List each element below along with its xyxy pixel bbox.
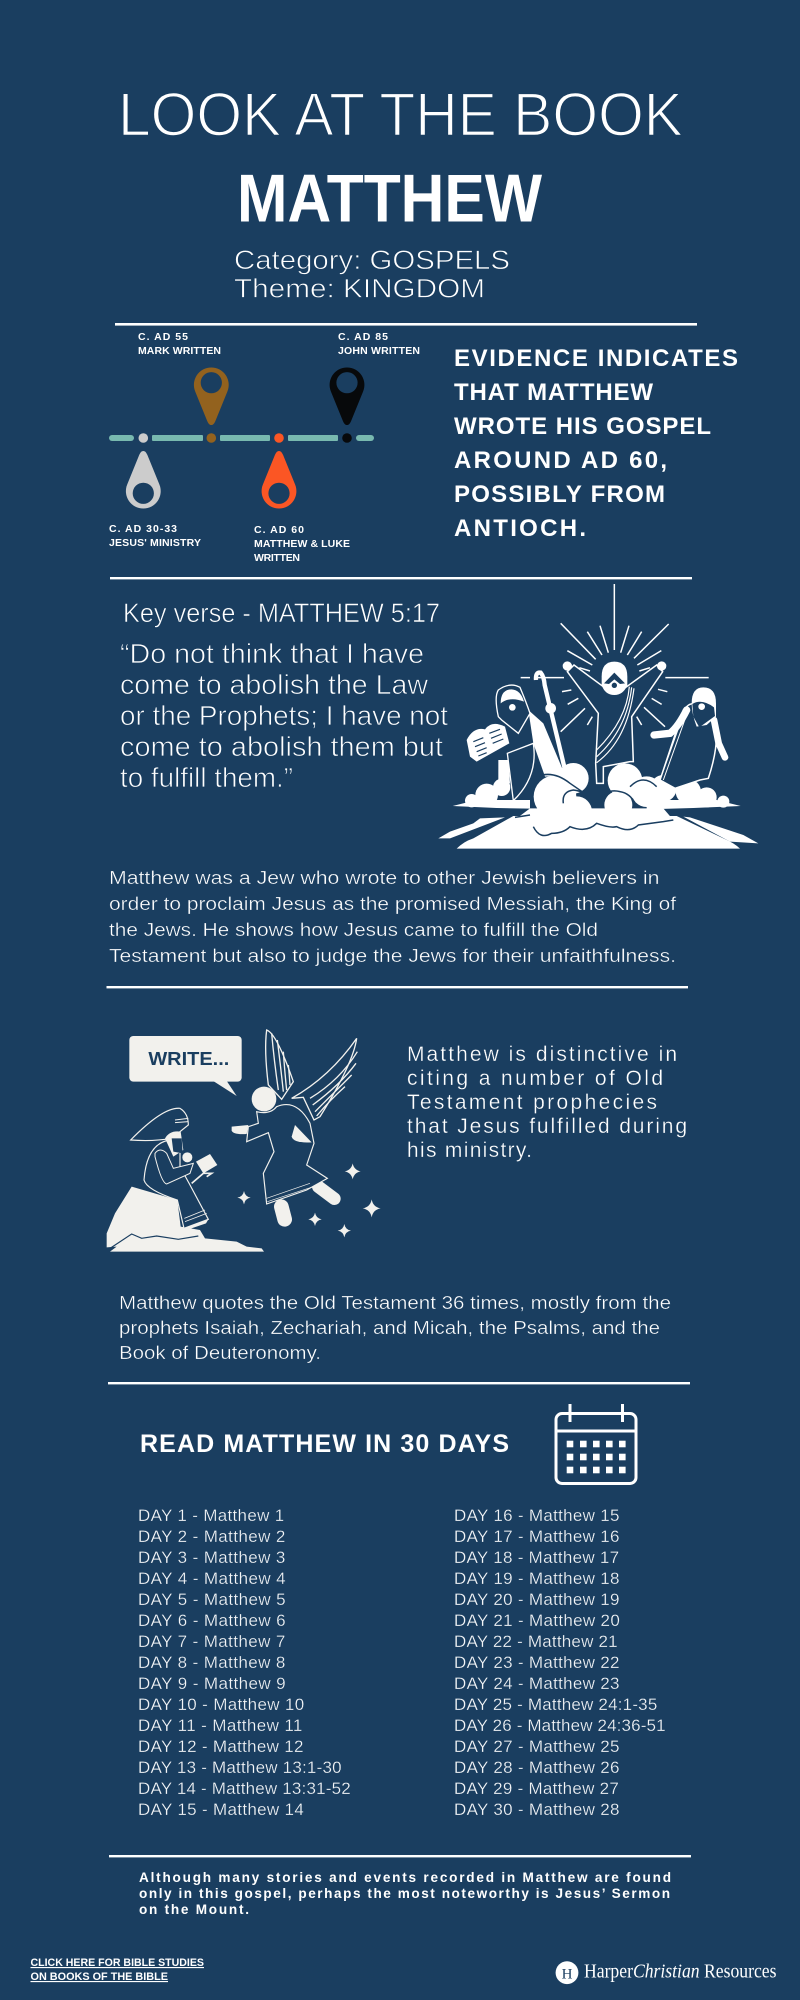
label: Mark [138, 331, 221, 357]
evidence statement: ANTIOCH. [454, 515, 586, 542]
evidence statement: POSSIBLY FROM [454, 481, 665, 508]
distinctive callout text: Matthew is distinctive in [407, 1043, 677, 1066]
reading plan: days 16 to 30: DAY 29 - Matthew 27 [454, 1779, 619, 1798]
key verse heading: Key verse - MATTHEW 5:17 [123, 598, 440, 628]
key verse quote [120, 638, 448, 793]
distinctive callout text: that Jesus fulfilled during [407, 1115, 687, 1138]
reading plan: days 16 to 30: DAY 17 - Matthew 16 [454, 1527, 620, 1546]
title: MATTHEW [237, 161, 543, 237]
timeline dots [138, 433, 352, 443]
sparkles [237, 1163, 381, 1237]
reading plan: days 16 to 30: DAY 30 - Matthew 28 [454, 1800, 620, 1819]
reading plan: days 1 to 15: DAY 13 - Matthew 13:1-30 [138, 1758, 342, 1777]
label: Jesus' ministry [109, 523, 201, 549]
reading plan: days 1 to 15: DAY 11 - Matthew 11 [138, 1716, 302, 1735]
closing note [139, 1870, 671, 1917]
label: Matthew and Luke: WRITTEN [254, 552, 300, 564]
reading plan: days 1 to 15: DAY 10 - Matthew 10 [138, 1695, 304, 1714]
evidence statement: WROTE HIS GOSPEL [454, 413, 711, 440]
label: Mark: MARK WRITTEN [138, 345, 221, 357]
distinctive callout text: citing a number of Old [407, 1067, 663, 1090]
reading plan: days 16 to 30: DAY 20 - Matthew 19 [454, 1590, 620, 1609]
logo: HarperChristian Resources: H [562, 1966, 573, 1982]
icon: calendar [556, 1404, 636, 1484]
label: John: JOHN WRITTEN [338, 345, 420, 357]
category and theme: Theme: KINGDOM [234, 274, 485, 304]
figure: Jesus [563, 661, 666, 783]
reading plan: days 16 to 30: DAY 21 - Matthew 20 [454, 1611, 620, 1630]
key verse quote: or the Prophets; I have not [120, 700, 448, 731]
key verse quote: come to abolish them but [120, 731, 443, 762]
reading plan: days 16 to 30: DAY 26 - Matthew 24:36-51 [454, 1716, 666, 1735]
evidence statement: EVIDENCE INDICATES [454, 345, 738, 372]
label: John [338, 331, 420, 357]
logo: HarperChristian Resources: HarperChristian Resources [584, 1962, 776, 1982]
closing note: on the Mount. [139, 1902, 249, 1917]
reading plan: days 1 to 15 [138, 1506, 351, 1819]
title [118, 81, 683, 237]
angel [232, 1030, 357, 1219]
key verse quote: “Do not think that I have [120, 638, 424, 669]
reading plan heading: READ MATTHEW IN 30 DAYS [140, 1430, 509, 1458]
speech bubble [129, 1036, 242, 1096]
reading plan: days 16 to 30: DAY 25 - Matthew 24:1-35 [454, 1695, 657, 1714]
paragraph: who Matthew was: Matthew was a Jew who wrote to other Jewish believers in [109, 867, 660, 888]
paragraph: who Matthew was: Testament but also to judge the Jews for their unfaithfulness. [109, 945, 676, 966]
reading plan: days 1 to 15: DAY 7 - Matthew 7 [138, 1632, 285, 1651]
reading plan: days 1 to 15: DAY 3 - Matthew 3 [138, 1548, 285, 1567]
closing note: only in this gospel, perhaps the most noteworthy is Jesus’ Sermon [139, 1886, 670, 1901]
label: Matthew and Luke [254, 524, 350, 564]
label: John: C. AD 85 [338, 331, 388, 343]
paragraph: who Matthew was: order to proclaim Jesus as the promised Messiah, the King of [109, 893, 677, 914]
reading plan: days 1 to 15: DAY 1 - Matthew 1 [138, 1506, 284, 1525]
scribe [131, 1108, 217, 1230]
distinctive callout text [407, 1043, 687, 1162]
figure: Moses [467, 673, 566, 801]
reading plan: days 16 to 30: DAY 24 - Matthew 23 [454, 1674, 620, 1693]
key verse quote: come to abolish the Law [120, 669, 429, 700]
closing note: Although many stories and events recorded in Matthew are found [139, 1870, 671, 1885]
reading plan: days 1 to 15: DAY 6 - Matthew 6 [138, 1611, 286, 1630]
rock [107, 1187, 264, 1252]
reading plan: days 1 to 15: DAY 8 - Matthew 8 [138, 1653, 285, 1672]
ground and side clouds [438, 763, 758, 849]
illustration: angel and scribe [107, 1030, 381, 1252]
illustration: transfiguration [438, 584, 758, 849]
link: bible studies: ON BOOKS OF THE BIBLE [30, 1971, 168, 1983]
reading plan: days 1 to 15: DAY 9 - Matthew 9 [138, 1674, 286, 1693]
timeline chart [109, 331, 420, 564]
label: Jesus' ministry: C. AD 30-33 [109, 523, 177, 535]
evidence statement: THAT MATTHEW [454, 379, 653, 406]
pin: Matthew and Luke [262, 451, 296, 509]
reading plan: days 16 to 30: DAY 27 - Matthew 25 [454, 1737, 620, 1756]
reading plan: days 16 to 30: DAY 28 - Matthew 26 [454, 1758, 620, 1777]
pin: John [330, 367, 364, 425]
paragraph: Old Testament quotes: prophets Isaiah, Zechariah, and Micah, the Psalms, and the [119, 1317, 660, 1338]
title: LOOK AT THE BOOK [118, 81, 683, 150]
reading plan: days 16 to 30: DAY 16 - Matthew 15 [454, 1506, 620, 1525]
reading plan: days 16 to 30: DAY 19 - Matthew 18 [454, 1569, 620, 1588]
figure: Elijah [654, 687, 725, 788]
central cloud [515, 774, 673, 837]
key verse quote: to fulfill them.” [120, 762, 293, 793]
reading plan: days 1 to 15: DAY 14 - Matthew 13:31-52 [138, 1779, 351, 1798]
paragraph: who Matthew was: the Jews. He shows how Jesus came to fulfill the Old [109, 919, 598, 940]
evidence statement [454, 345, 738, 542]
pin: Jesus' ministry [126, 451, 161, 509]
reading plan: days 16 to 30: DAY 18 - Matthew 17 [454, 1548, 619, 1567]
distinctive callout text: Testament prophecies [407, 1091, 657, 1114]
evidence statement: AROUND AD 60, [454, 447, 667, 474]
reading plan: days 1 to 15: DAY 2 - Matthew 2 [138, 1527, 285, 1546]
speech bubble: WRITE... [148, 1048, 229, 1069]
reading plan: days 16 to 30: DAY 23 - Matthew 22 [454, 1653, 620, 1672]
reading plan: days 16 to 30: DAY 22 - Matthew 21 [454, 1632, 618, 1651]
light rays [521, 584, 709, 732]
label: Matthew and Luke: C. AD 60 [254, 524, 304, 536]
paragraph: who Matthew was [109, 867, 677, 966]
label: Jesus' ministry: JESUS' MINISTRY [109, 537, 201, 549]
reading plan: days 1 to 15: DAY 4 - Matthew 4 [138, 1569, 286, 1588]
reading plan: days 1 to 15: DAY 15 - Matthew 14 [138, 1800, 304, 1819]
pin: Mark [194, 367, 229, 425]
paragraph: Old Testament quotes: Matthew quotes the Old Testament 36 times, mostly from the [119, 1292, 671, 1313]
timeline bar [109, 435, 374, 441]
label: Mark: C. AD 55 [138, 331, 188, 343]
label: Matthew and Luke: MATTHEW & LUKE [254, 538, 350, 550]
category and theme: Category: GOSPELS [234, 245, 510, 275]
link: bible studies: CLICK HERE FOR BIBLE STUDIES [30, 1957, 204, 1969]
distinctive callout text: his ministry. [407, 1139, 532, 1162]
link: bible studies [30, 1957, 204, 1983]
paragraph: Old Testament quotes [119, 1292, 671, 1363]
paragraph: Old Testament quotes: Book of Deuteronomy. [119, 1342, 321, 1363]
reading plan: days 1 to 15: DAY 12 - Matthew 12 [138, 1737, 304, 1756]
category and theme [234, 245, 510, 304]
reading plan: days 16 to 30 [454, 1506, 666, 1819]
reading plan: days 1 to 15: DAY 5 - Matthew 5 [138, 1590, 286, 1609]
